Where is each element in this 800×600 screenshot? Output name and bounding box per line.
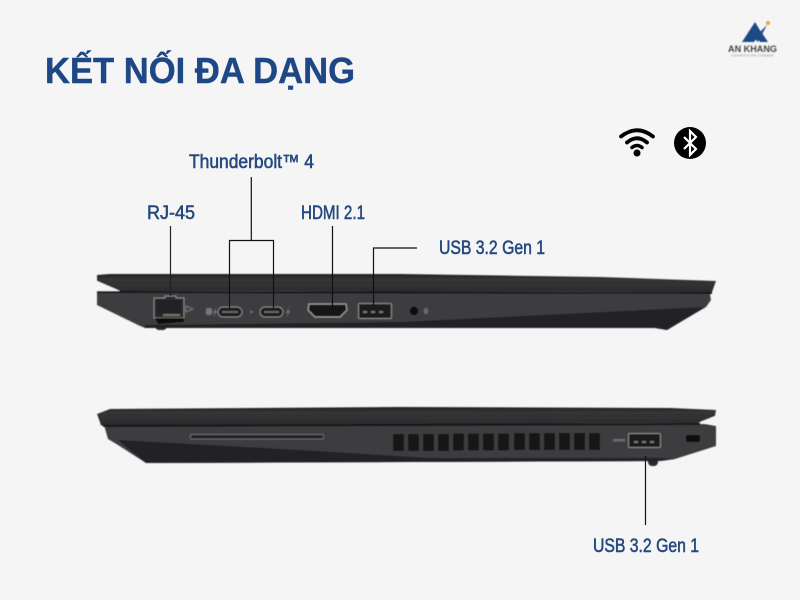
title: KẾT NỐI ĐA DẠNG [45,49,355,91]
callout: RJ-45 [147,203,195,296]
port icons [206,306,290,318]
laptop lid [97,274,716,292]
laptop: left side view with ports [97,274,716,330]
port: Thunderbolt 4 left [218,307,242,317]
port: Thunderbolt 4 right [260,307,283,317]
callout: USB 3.2 Gen 1 bottom: USB 3.2 Gen 1 [593,536,699,557]
callout: USB 3.2 Gen 1 top [374,238,545,306]
laptop base [97,292,711,330]
laptop lid [97,407,716,425]
laptop foot [155,320,167,330]
logo: An Khang: AN KHANG [728,44,777,54]
USB symbol [613,439,625,442]
port: USB 3.2 [628,434,660,448]
callout: USB 3.2 Gen 1 top: USB 3.2 Gen 1 [439,238,545,259]
callout: RJ-45: RJ-45 [147,203,195,224]
laptop hinge gap [97,291,712,294]
port: USB 3.2 [358,304,392,318]
security lock slot [686,435,700,442]
callout: HDMI 2.1: HDMI 2.1 [301,203,365,224]
laptop foot [648,455,658,466]
card slot [190,434,324,439]
laptop base [104,424,716,463]
callout: Thunderbolt 4 [189,152,314,308]
cooling vents [393,433,600,451]
callout: HDMI 2.1 [301,203,365,310]
icon: bluetooth [674,127,706,159]
port: audio jack [410,307,418,315]
icon: wifi [621,130,653,156]
callout: USB 3.2 Gen 1 bottom [593,456,699,557]
logo: An Khang [728,21,777,58]
callout: Thunderbolt 4: Thunderbolt™ 4 [189,152,314,173]
laptop hinge gap [100,423,700,427]
logo: An Khang: Connect to the Complete [731,54,774,58]
port: RJ-45 [154,296,193,324]
laptop: right side view [97,407,716,466]
port: HDMI [308,304,347,317]
